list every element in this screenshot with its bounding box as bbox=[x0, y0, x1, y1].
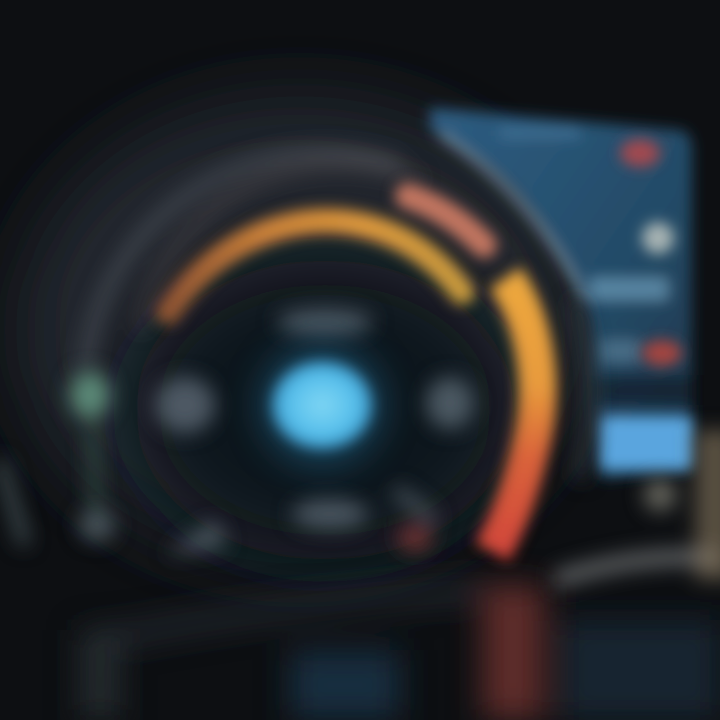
reflection: warm highlights bbox=[555, 430, 720, 580]
reflection: warm corner bbox=[695, 430, 720, 580]
panel row: top bar bbox=[500, 128, 580, 138]
gauge: salmon segment bbox=[408, 196, 484, 245]
dial mark: bottom bbox=[292, 499, 368, 529]
reflection: grey column left bbox=[80, 630, 120, 720]
reflection: pale spot bbox=[644, 479, 676, 511]
icon: pale mark bbox=[642, 222, 674, 254]
callout: bright blue button bbox=[600, 416, 692, 470]
panel row: dark band bbox=[590, 375, 692, 405]
dial mark: red dot bbox=[397, 524, 433, 552]
panel icons bbox=[600, 139, 692, 470]
dial mark: left bbox=[155, 377, 215, 433]
panel row: mid bar bbox=[600, 340, 640, 362]
icon: lower left mark bbox=[79, 509, 115, 541]
gauge: yellow to red arc bbox=[492, 278, 538, 552]
gauge centre: blue glowing core bbox=[256, 339, 388, 471]
reflection: pale streak right bbox=[555, 557, 720, 580]
panel row: light bar bbox=[590, 278, 668, 300]
dial mark: lower right bbox=[395, 490, 435, 520]
gauge: inner dial marks bbox=[155, 308, 474, 555]
panel highlight streak bbox=[440, 135, 585, 300]
dial mark: lower left bbox=[165, 520, 228, 555]
panel: blue info screen bbox=[430, 108, 692, 480]
reflection: blue right bbox=[560, 620, 720, 720]
gauge: green indicator bbox=[0, 371, 115, 545]
reflection: bottom surface bbox=[80, 585, 720, 720]
dial mark: top bbox=[277, 308, 373, 336]
reflection: lower streak bbox=[100, 590, 480, 640]
reflection: blue column bbox=[290, 650, 400, 720]
icon: red mark top bbox=[620, 139, 660, 167]
gauge: orange arc bbox=[168, 221, 462, 312]
dial mark: right bbox=[426, 377, 474, 429]
icon: red mark lower bbox=[642, 340, 682, 366]
gauge: outer grey arcs bbox=[85, 153, 589, 480]
reflection: red column bbox=[482, 585, 544, 720]
